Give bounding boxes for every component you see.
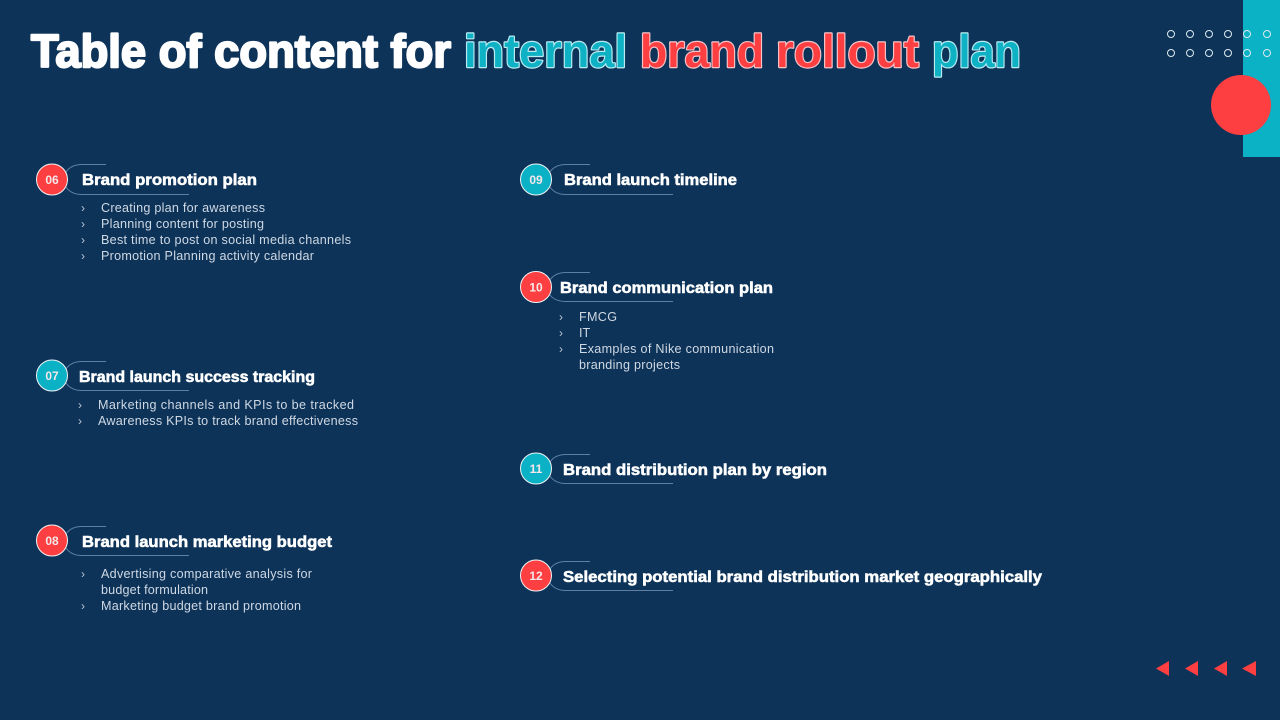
section 08: Brand launch marketing budget (36, 525, 332, 613)
bullets 10: Examples of Nike communication (579, 342, 774, 356)
bullets 08: › (81, 599, 85, 613)
badge 12: 12 (529, 569, 543, 583)
badge 07 (36, 360, 68, 391)
bullets 07 (78, 398, 358, 428)
bullets 06: Planning content for posting (101, 217, 264, 231)
decorative corner: teal bar, dots and red circle (1168, 0, 1280, 157)
heading 10: Brand communication plan (560, 280, 773, 297)
badge 10: 10 (529, 280, 543, 294)
badge 06: 06 (45, 173, 59, 187)
title: internal (464, 25, 627, 77)
title: plan (932, 25, 1021, 77)
section 06: Brand promotion plan (36, 164, 351, 263)
badge 12 (520, 560, 552, 591)
heading 12: Selecting potential brand distribution market geographically (563, 569, 1042, 586)
badge 09 (520, 164, 552, 195)
section 07: Brand launch success tracking (36, 360, 358, 428)
badge 08 (36, 525, 68, 556)
bullets 06: Promotion Planning activity calendar (101, 249, 314, 263)
bullets 07: › (78, 398, 82, 412)
badge 07: 07 (45, 369, 59, 383)
bullets 08: › (81, 567, 85, 581)
section 12: Selecting potential brand distribution market geographically (520, 560, 1042, 591)
badge 09: 09 (529, 173, 543, 187)
title: brand (640, 25, 764, 77)
bullets 10: branding projects (579, 358, 680, 372)
bullets 10: › (559, 310, 563, 324)
bullets 07: Awareness KPIs to track brand effectiveness (98, 414, 358, 428)
bullets 06: Creating plan for awareness (101, 201, 265, 215)
badge 10 (520, 272, 552, 302)
title: Table of content for (31, 25, 451, 77)
bullets 07: Marketing channels and KPIs to be tracked (98, 398, 354, 412)
bullets 10: IT (579, 326, 590, 340)
bullets 08: Marketing budget brand promotion (101, 599, 301, 613)
bullets 08: budget formulation (101, 583, 208, 597)
badge 08: 08 (45, 534, 59, 548)
heading 08: Brand launch marketing budget (82, 534, 332, 551)
heading 11: Brand distribution plan by region (563, 462, 827, 479)
bullets 06: › (81, 201, 85, 215)
bullets 06: › (81, 249, 85, 263)
bullets 06: › (81, 233, 85, 247)
section 09: Brand launch timeline (520, 164, 737, 195)
bullets 08: Advertising comparative analysis for (101, 567, 312, 581)
badge 11: 11 (530, 462, 543, 476)
heading 09: Brand launch timeline (564, 172, 737, 189)
bullets 06: › (81, 217, 85, 231)
bullets 10: FMCG (579, 310, 617, 324)
bullets 06 (81, 201, 351, 263)
section 11: Brand distribution plan by region (520, 453, 827, 484)
bullets 10: › (559, 326, 563, 340)
bullets 07: › (78, 414, 82, 428)
bullets 06: Best time to post on social media channels (101, 233, 351, 247)
badge 06 (36, 164, 68, 195)
heading 07: Brand launch success tracking (79, 369, 315, 386)
icon: red back arrows (1156, 661, 1256, 676)
title: rollout (776, 25, 919, 77)
section 10: Brand communication plan (520, 272, 774, 372)
bullets 10: › (559, 342, 563, 356)
heading 06: Brand promotion plan (82, 172, 257, 189)
bullets 10 (559, 310, 774, 372)
bullets 08 (81, 567, 312, 613)
badge 11 (520, 453, 552, 484)
title (31, 25, 1021, 77)
